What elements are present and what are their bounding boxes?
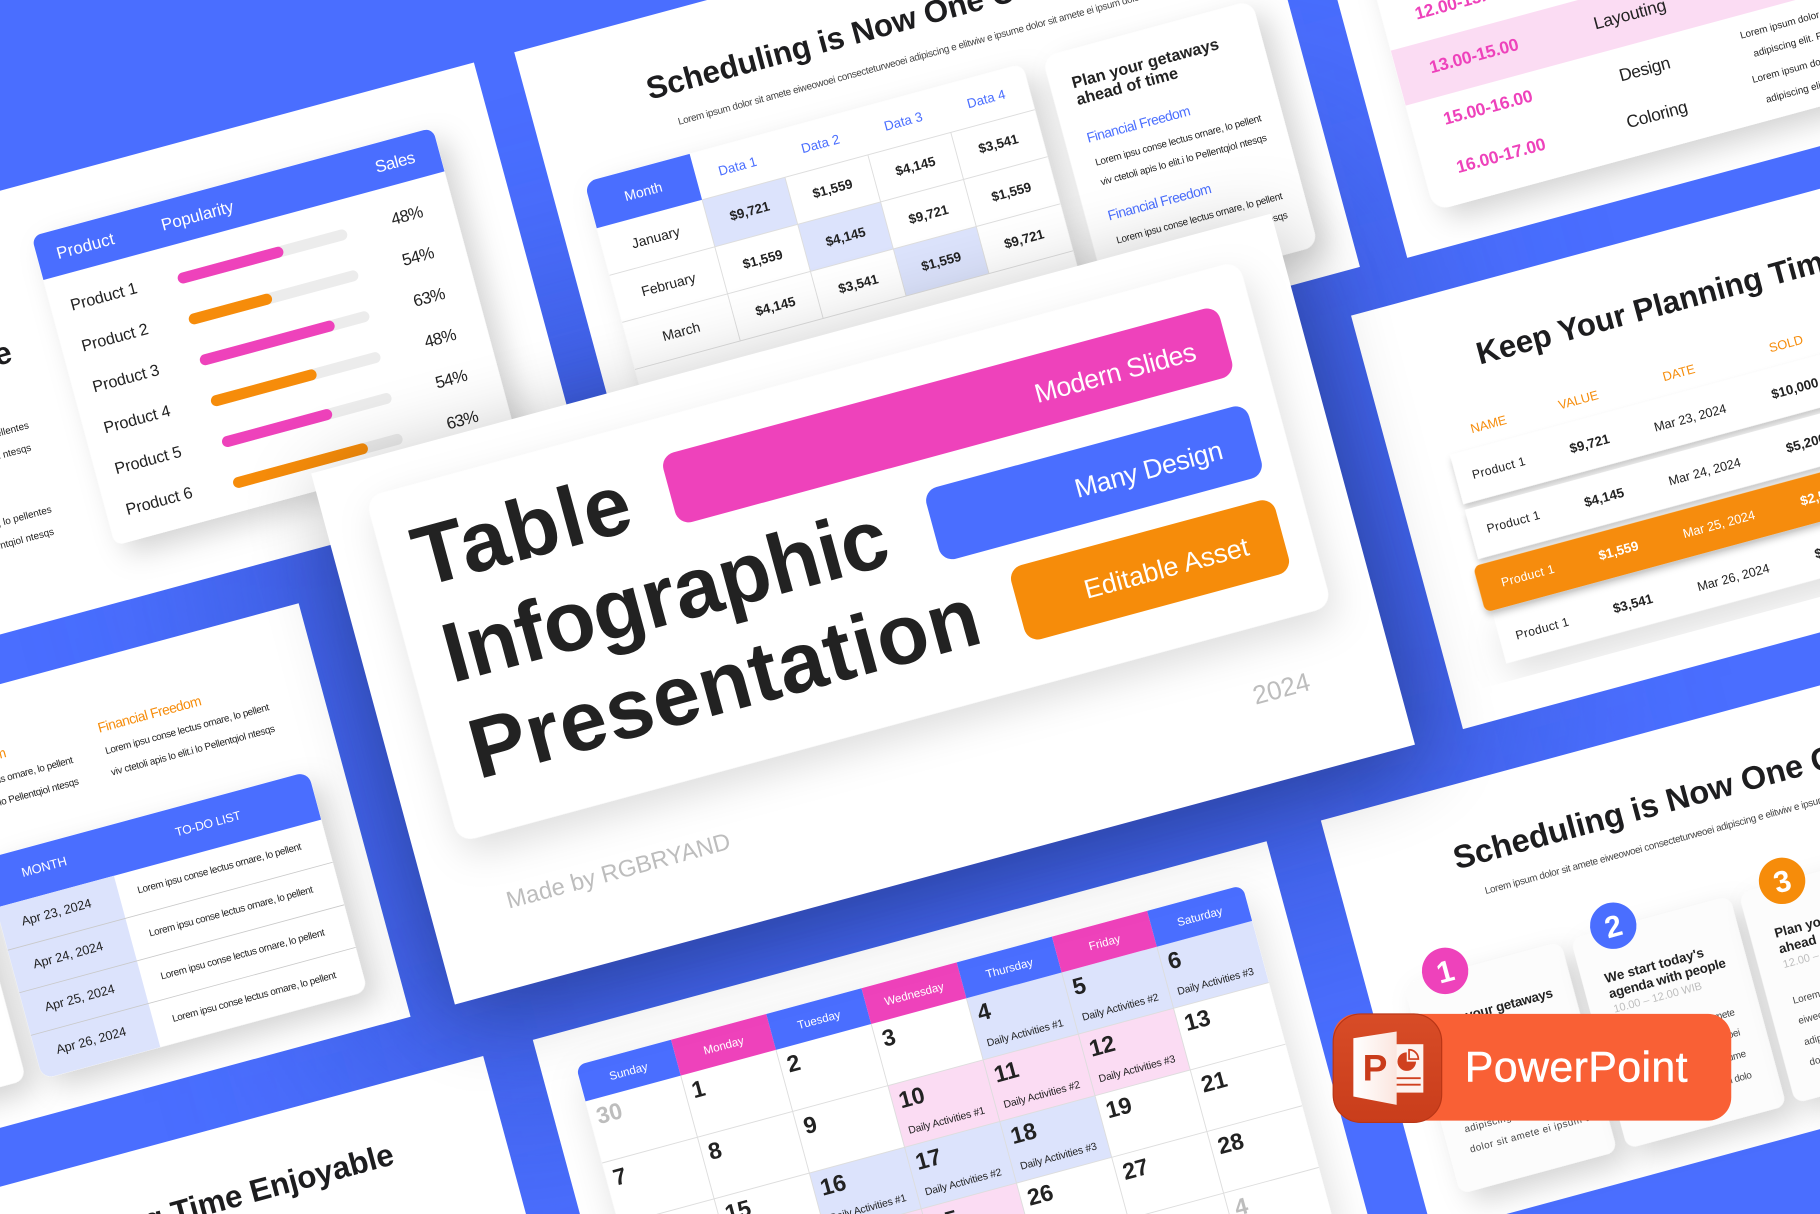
- icon: powerpoint: P: [1363, 1047, 1387, 1089]
- table rows: February: [639, 269, 697, 299]
- card 2: Lorem ipsum dolor sit amete: [1620, 1007, 1737, 1048]
- table header labels: Sales: [373, 148, 417, 177]
- table row 1: [1450, 282, 1820, 504]
- side card: plan your getaways: [1042, 0, 1318, 303]
- powerpoint badge: [1333, 1014, 1731, 1122]
- day numbers: 1: [689, 1075, 708, 1103]
- day numbers: 26: [1024, 1179, 1056, 1211]
- sales percentages: 63%: [444, 407, 481, 433]
- card 2: agenda with people: [1607, 955, 1727, 1001]
- calendar table: [576, 885, 1335, 1214]
- date column: [0, 876, 160, 1079]
- table row 2: Mar 24, 2024: [1667, 454, 1742, 488]
- day numbers: 17: [912, 1143, 944, 1175]
- daily activity labels: [795, 967, 1289, 1214]
- table rows: $9,721: [907, 202, 951, 227]
- blue tag: many design: [923, 403, 1265, 562]
- task labels: Coloring: [1624, 96, 1690, 132]
- data table: [584, 64, 1086, 416]
- table row 4: $3,541: [1611, 591, 1655, 616]
- column headers: NAME: [1469, 412, 1508, 436]
- day numbers: [593, 942, 1263, 1214]
- financial freedom column right: viv ctetoli apis lo elit.i lo Pellentqiol ntesqs: [110, 724, 276, 779]
- day numbers: 5: [1070, 972, 1089, 1000]
- month header cell: [584, 154, 702, 228]
- table rows: $4,145: [894, 153, 938, 179]
- weekday header: Wednesday: [883, 980, 946, 1009]
- side card: plan your getaways: Lorem ipsu conse lectus ornare, lo pellent: [1115, 191, 1284, 247]
- sales percentages: 54%: [400, 243, 436, 270]
- table rows: $3,541: [837, 271, 881, 296]
- slide: keep your planning time: [1351, 117, 1820, 729]
- table header labels: Popularity: [159, 197, 236, 235]
- pink tag: modern slides: [660, 305, 1235, 526]
- task descriptions: [1739, 0, 1820, 108]
- title: presentation: Presentation: [459, 568, 990, 797]
- task labels: [1591, 0, 1695, 134]
- product names: Product 6: [124, 484, 195, 519]
- to-do entries: Lorem ipsu conse lectus ornare, lo pellent: [148, 884, 315, 939]
- table header labels: [20, 806, 243, 881]
- day numbers: 18: [1008, 1117, 1039, 1149]
- number badge 1: [1417, 942, 1474, 999]
- table row 4: Product 1: [1514, 615, 1571, 643]
- card 1: adipiscing e elitwiw e ipsume: [1463, 1088, 1601, 1135]
- highlighted table row 3: Product 1: [1500, 562, 1556, 590]
- daily activity labels: Daily Activities #3: [1176, 967, 1255, 998]
- daily activity labels: Daily Activities #2: [924, 1167, 1003, 1198]
- card 1: Plan your getaways: [1434, 985, 1555, 1031]
- title card: [366, 261, 1332, 842]
- card 2: dolor sit amete ei ipsum dolo: [1637, 1070, 1754, 1111]
- side card: plan your getaways: Financial Freedom: [1106, 180, 1213, 223]
- weekday header: Monday: [702, 1034, 746, 1058]
- number badge 1: 1: [1433, 954, 1458, 990]
- blue tag: many design: Many Design: [1071, 435, 1226, 504]
- day numbers: 6: [1165, 946, 1184, 974]
- product names: [69, 279, 195, 519]
- side card: plan your getaways: viv ctetoli apis lo elit.i lo Pellentqiol ntesqs: [1120, 210, 1289, 266]
- sales percentages: 48%: [422, 325, 459, 352]
- daily activity labels: Daily Activities #3: [1019, 1141, 1098, 1173]
- highlighted row: [1391, 0, 1820, 106]
- daily activity labels: Daily Activities #1: [907, 1106, 987, 1137]
- day numbers: 2: [784, 1049, 803, 1077]
- orange tag: editable asset: Editable Asset: [1081, 531, 1253, 605]
- table row 4: [1493, 441, 1820, 663]
- day numbers: 8: [705, 1136, 725, 1165]
- card 2: We start today's: [1603, 945, 1705, 986]
- popularity bars: [176, 228, 404, 489]
- card 2: [1571, 896, 1786, 1149]
- dates: Apr 25, 2024: [43, 981, 116, 1014]
- product names: Product 2: [80, 320, 150, 355]
- slide: to-do list: [0, 603, 411, 1214]
- to-do entries: Lorem ipsu conse lectus ornare, lo pellent: [171, 970, 338, 1025]
- secondary card behind: [0, 865, 26, 1168]
- table rows: $4,145: [754, 294, 798, 319]
- side card: plan your getaways: viv ctetoli apis lo elit.i lo Pellentqiol ntesqs: [1099, 133, 1268, 188]
- day numbers: 30: [593, 1097, 625, 1129]
- card 1: dolor sit amete ei ipsum dolo: [1469, 1108, 1607, 1156]
- side card: plan your getaways: Lorem ipsu conse lectus ornare, lo pellent: [1094, 113, 1263, 169]
- weekday header: Thursday: [984, 956, 1035, 981]
- to-do entries: Lorem ipsu conse lectus ornare, lo pellent: [160, 927, 326, 982]
- table rows: $3,541: [977, 131, 1021, 156]
- orange tag: editable asset: [1008, 497, 1292, 643]
- weekday header: Saturday: [1176, 905, 1224, 929]
- day numbers: 16: [817, 1169, 849, 1201]
- table row 1: $9,721: [1568, 431, 1612, 456]
- side card: plan your getaways: Financial Freedom: [1085, 102, 1192, 146]
- table header labels: [623, 85, 1008, 204]
- day numbers: 10: [896, 1081, 927, 1113]
- number badge 3: [1754, 852, 1811, 909]
- time labels: 13.00-15.00: [1427, 34, 1521, 77]
- financial freedom column left: [0, 728, 80, 831]
- table rows: January: [630, 223, 682, 251]
- weekday header: Friday: [1087, 932, 1122, 953]
- product table card: [32, 128, 516, 546]
- daily activity labels: Daily Activities #3: [1098, 1054, 1177, 1085]
- column headers: [1469, 332, 1805, 436]
- table rows: $1,559: [990, 179, 1033, 204]
- side card: plan your getaways: ahead of time: [1074, 64, 1180, 109]
- table header labels: Data 1: [717, 154, 758, 179]
- financial freedom column right: Financial Freedom: [96, 692, 203, 736]
- table header labels: Data 3: [882, 109, 924, 134]
- icon: powerpoint: [1333, 1014, 1442, 1122]
- sales percentages: 63%: [411, 284, 447, 311]
- to-do entries: Lorem ipsu conse lectus ornare, lo pellent: [136, 841, 303, 896]
- column headers: VALUE: [1557, 387, 1600, 412]
- title: infographic: Infographic: [432, 489, 898, 700]
- slide: product popularity table: [0, 62, 586, 675]
- table row 1: $10,000: [1770, 375, 1820, 402]
- number badge 3: 3: [1770, 864, 1795, 900]
- highlighted table row 3: Mar 25, 2024: [1681, 507, 1757, 541]
- sales percentages: 54%: [433, 366, 470, 393]
- title: table: Table: [402, 455, 641, 604]
- to-do entries: [136, 841, 338, 1025]
- table rows: $9,721: [728, 198, 772, 224]
- table rows: $9,721: [1002, 226, 1046, 252]
- table header labels: Month: [623, 178, 664, 204]
- product names: Product 4: [102, 402, 173, 437]
- day numbers: 19: [1103, 1091, 1135, 1123]
- table row 2: Product 1: [1485, 508, 1542, 536]
- card 1: ahead of time: [1438, 1010, 1525, 1047]
- card 2: adipiscing e elitwiw e ipsume: [1631, 1049, 1748, 1090]
- table header labels: Product: [54, 229, 117, 263]
- card 1: Lorem ipsum dolor sit amete: [1452, 1047, 1590, 1094]
- time labels: 16.00-17.00: [1454, 134, 1548, 177]
- main slide cast shadow: [320, 228, 1424, 1019]
- table header labels: Data 4: [965, 86, 1008, 111]
- table rows: $4,145: [824, 224, 868, 249]
- financial freedom column right: Lorem ipsu conse lectus ornare, lo pellent: [104, 702, 271, 757]
- pink tag: modern slides: Modern Slides: [1031, 337, 1199, 409]
- table rows: $1,559: [811, 176, 854, 201]
- day numbers: 21: [1198, 1066, 1230, 1098]
- product names: Product 1: [69, 279, 139, 315]
- table row 2: [1465, 337, 1820, 559]
- highlighted cells: [702, 132, 989, 341]
- table row 1: Mar 23, 2024: [1652, 401, 1728, 435]
- weekday header: [576, 885, 1252, 1101]
- table row 2: $4,145: [1582, 485, 1626, 510]
- dates: Apr 24, 2024: [31, 938, 105, 971]
- table header labels: [54, 148, 417, 263]
- product names: Product 3: [91, 361, 161, 396]
- time labels: 15.00-16.00: [1441, 86, 1535, 129]
- credit label: Made by RGBRYAND: [503, 828, 733, 914]
- column headers: DATE: [1661, 361, 1697, 384]
- column headers: SOLD: [1767, 332, 1805, 355]
- day numbers: 13: [1181, 1004, 1213, 1036]
- number badge 2: 2: [1601, 909, 1626, 945]
- day numbers: 7: [610, 1162, 629, 1191]
- day numbers: 12: [1086, 1030, 1118, 1062]
- table header labels: TO-DO LIST: [174, 808, 243, 839]
- dates: [20, 895, 128, 1057]
- weekday header: Sunday: [608, 1060, 649, 1083]
- sales percentages: [389, 202, 481, 433]
- daily activity labels: Daily Activities #2: [1081, 992, 1160, 1024]
- table rows: $1,559: [920, 249, 963, 274]
- table rows: March: [660, 319, 702, 344]
- dates: Apr 23, 2024: [20, 895, 93, 929]
- daily activity labels: Daily Activities #1: [986, 1018, 1065, 1049]
- daily activity labels: Daily Activities #2: [1002, 1080, 1082, 1111]
- table rows: $1,559: [741, 247, 784, 272]
- side card: plan your getaways: Plan your getaways: [1070, 35, 1221, 92]
- day numbers: 27: [1120, 1153, 1151, 1185]
- table row 4: Mar 26, 2024: [1695, 560, 1771, 594]
- slide: calendar: [533, 841, 1379, 1214]
- highlighted day cells: [776, 921, 1319, 1214]
- task labels: Design: [1617, 52, 1672, 85]
- day numbers: 11: [991, 1056, 1022, 1088]
- day numbers: 4: [974, 997, 994, 1026]
- year label: 2024: [1249, 666, 1313, 711]
- sales percentages: 48%: [389, 202, 425, 229]
- slide: bottom-left title: [0, 1056, 595, 1214]
- financial freedom column right: [96, 675, 277, 779]
- slide: numbered schedule cards: [1321, 622, 1820, 1214]
- left column body text: [0, 420, 59, 574]
- day numbers: 3: [879, 1023, 898, 1052]
- card 3: [1739, 851, 1820, 1103]
- table header labels: Data 2: [799, 131, 841, 156]
- slide: daily timetable: [1295, 0, 1820, 258]
- label: powerpoint: PowerPoint: [1465, 1044, 1688, 1092]
- table header labels: MONTH: [20, 853, 68, 880]
- day numbers: 28: [1215, 1127, 1247, 1159]
- card 2: eiweowoei consecteturweoei: [1626, 1027, 1742, 1069]
- time labels: [1413, 0, 1548, 177]
- highlighted table row 3: $1,559: [1597, 538, 1640, 563]
- table row 1: Product 1: [1471, 454, 1527, 482]
- card 1: [1404, 942, 1617, 1194]
- main cover slide: [311, 214, 1415, 1005]
- card 1: eiweowoei consecteturweoei: [1458, 1067, 1595, 1114]
- product names: Product 5: [113, 443, 184, 478]
- weekday header: Tuesday: [796, 1008, 842, 1032]
- to-do table card: [0, 771, 368, 1079]
- card 2: 10.00 – 12.00 WIB: [1612, 980, 1703, 1016]
- day numbers: 9: [801, 1111, 820, 1139]
- dates: Apr 26, 2024: [54, 1024, 128, 1057]
- number badge 2: [1585, 897, 1642, 954]
- table rows: [627, 131, 1046, 346]
- slide: scheduling table: [514, 0, 1360, 466]
- highlighted table row 3: [1473, 390, 1820, 612]
- timetable card: [1363, 0, 1820, 211]
- card 1: 08.00 – 10.00 WIB: [1443, 1026, 1534, 1061]
